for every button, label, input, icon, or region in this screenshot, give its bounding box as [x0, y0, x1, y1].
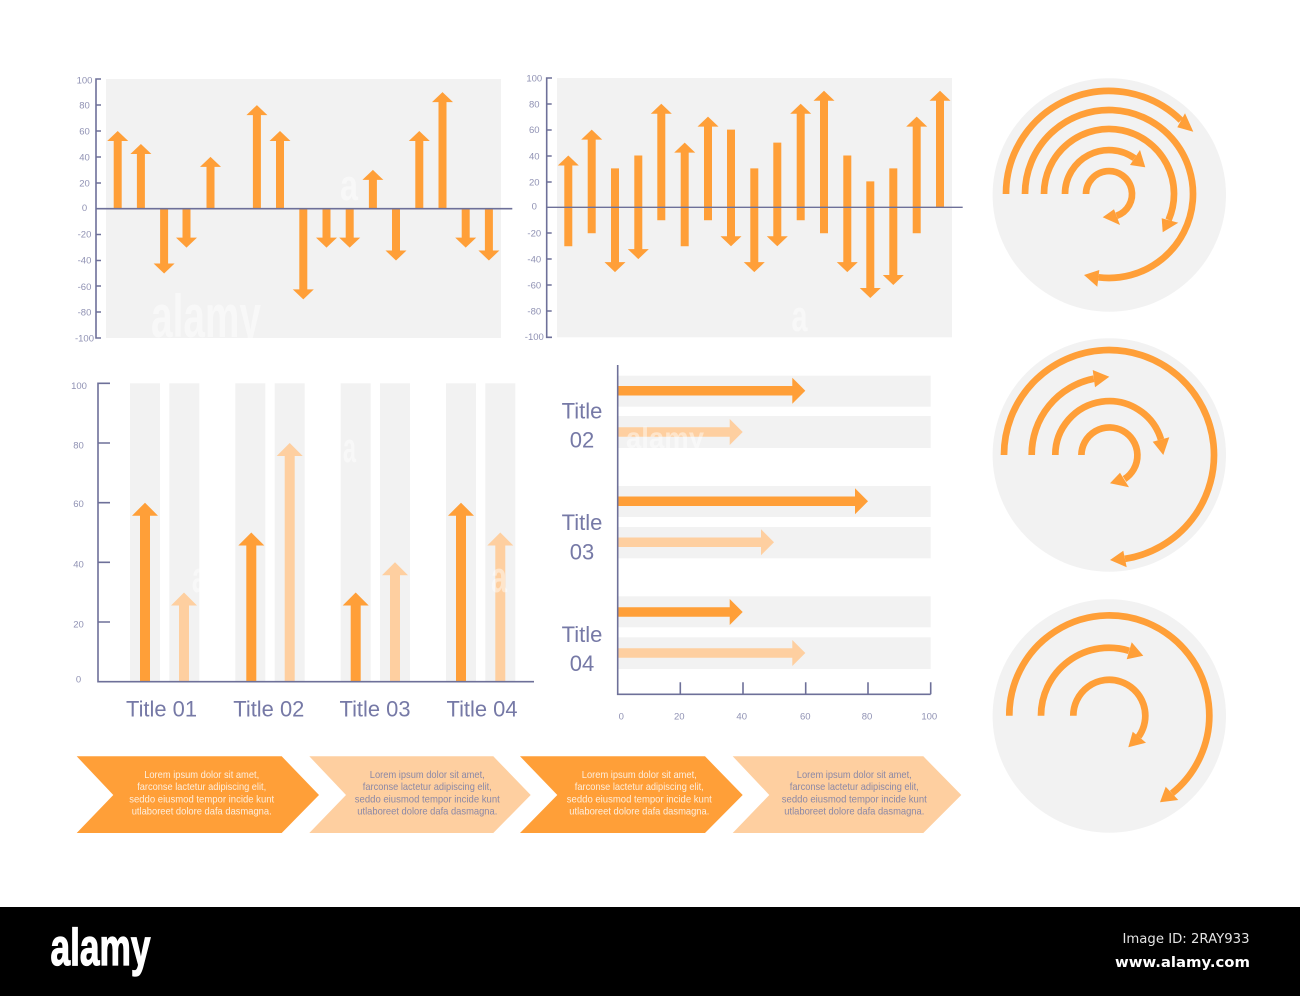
- y axis labels: 80: [73, 440, 84, 451]
- chevron step 4: farconse lactetur adipiscing elit,: [790, 781, 919, 793]
- chevron step 3: seddo eiusmod tempor incide kunt: [567, 793, 712, 805]
- chart: bottom-left grouped vertical arrows: a: [192, 553, 206, 602]
- chevron step 1: [77, 756, 319, 833]
- radial chart: four arcs: [993, 338, 1226, 572]
- category titles: Title 03: [340, 697, 410, 722]
- chevron step 1: Lorem ipsum dolor sit amet,: [144, 769, 259, 781]
- row titles: Title: [562, 398, 602, 423]
- chart: middle horizontal arrows: alamy: [626, 422, 704, 455]
- category titles: Title 04: [446, 697, 518, 722]
- x axis labels: 40: [736, 711, 747, 722]
- category titles: Title 02: [233, 697, 304, 722]
- y axis labels: 40: [79, 153, 90, 164]
- chevron step 4: seddo eiusmod tempor incide kunt: [782, 793, 927, 805]
- chevron step 2: [309, 756, 531, 833]
- chart: bottom-left grouped vertical arrows: a: [491, 553, 507, 602]
- chevron step 1: farconse lactetur adipiscing elit,: [137, 781, 266, 793]
- chart: middle horizontal arrows: [562, 365, 937, 722]
- orange arrows: [107, 92, 499, 299]
- y axis labels: 100: [71, 381, 87, 392]
- y axis labels: -100: [75, 334, 94, 345]
- row titles: [562, 398, 602, 676]
- chevron step 3: Lorem ipsum dolor sit amet,: [582, 769, 697, 781]
- row titles: Title: [562, 510, 602, 535]
- y axis labels: -80: [527, 306, 541, 317]
- chevron step 3: utlaboreet dolore dafa dasmagna.: [569, 806, 709, 818]
- y axis labels: -20: [527, 229, 541, 240]
- x axis labels: 20: [674, 711, 685, 722]
- chart: bottom-left grouped vertical arrows: a: [343, 424, 356, 471]
- y axis with ticks: [96, 79, 101, 338]
- chevron step 3: [520, 756, 743, 833]
- row titles: 02: [570, 428, 594, 453]
- radial chart: three arcs: [993, 599, 1226, 833]
- x axis labels: 80: [862, 711, 872, 722]
- orange arrows: [132, 503, 474, 682]
- chevron step 2: utlaboreet dolore dafa dasmagna.: [357, 806, 497, 818]
- footer logo: alamy: [50, 919, 151, 977]
- row titles: Title: [562, 622, 602, 647]
- y axis labels: 80: [529, 99, 540, 110]
- zero line: [547, 206, 963, 208]
- x axis labels: 60: [800, 711, 811, 722]
- y axis labels: [75, 75, 94, 345]
- arcs: [1004, 350, 1214, 559]
- y axis labels: -40: [527, 254, 541, 265]
- chevron step 2: Lorem ipsum dolor sit amet,: [370, 769, 485, 781]
- category titles: Title 01: [126, 697, 197, 722]
- zero line: [96, 208, 512, 210]
- chart: top-left vertical arrow chart: a: [340, 161, 358, 210]
- y axis labels: 60: [73, 499, 84, 510]
- y axis labels: [71, 381, 87, 686]
- y axis labels: 40: [73, 560, 84, 571]
- arrowheads: [1127, 642, 1178, 802]
- circle background: [993, 338, 1226, 572]
- orange arrows: [558, 91, 950, 298]
- light orange arrows: [171, 443, 513, 682]
- y axis labels: -60: [527, 281, 541, 292]
- arrowheads: [1093, 370, 1169, 567]
- chevron step 1: utlaboreet dolore dafa dasmagna.: [132, 806, 272, 818]
- y axis with ticks: [547, 78, 552, 337]
- arcs: [1006, 91, 1193, 278]
- chevron step 2: seddo eiusmod tempor incide kunt: [355, 793, 500, 805]
- circle background: [993, 599, 1226, 833]
- axes: [98, 383, 534, 682]
- y axis labels: 0: [76, 675, 81, 686]
- y axis labels: 0: [82, 203, 87, 214]
- y axis labels: 20: [529, 177, 540, 188]
- orange arrows: [618, 378, 868, 625]
- chart: top-left vertical arrow chart: [75, 75, 512, 350]
- chevron step 4: Lorem ipsum dolor sit amet,: [797, 769, 912, 781]
- axes: [618, 365, 931, 694]
- radial chart: five arcs: [993, 78, 1226, 312]
- image id: Image ID: 2RAY933: [1122, 932, 1250, 947]
- row titles: 04: [570, 651, 594, 676]
- x axis labels: 0: [619, 711, 624, 722]
- background columns: [130, 383, 515, 682]
- chart panel background: [106, 79, 501, 338]
- y axis labels: 40: [529, 151, 540, 162]
- chevron step 4: [733, 756, 961, 833]
- chart: top-left vertical arrow chart: alamy: [151, 283, 261, 350]
- chevron step 4: utlaboreet dolore dafa dasmagna.: [784, 806, 924, 818]
- arcs: [1009, 615, 1209, 793]
- y axis labels: 60: [529, 125, 540, 136]
- y axis labels: -60: [78, 282, 91, 293]
- y axis labels: [525, 73, 544, 343]
- chevron step 2: farconse lactetur adipiscing elit,: [363, 781, 492, 793]
- y axis labels: -80: [78, 308, 91, 319]
- chevron step 1: seddo eiusmod tempor incide kunt: [129, 793, 274, 805]
- circle background: [993, 78, 1226, 312]
- y axis labels: -40: [78, 256, 91, 267]
- chart panel background: [557, 78, 952, 337]
- y axis labels: 20: [73, 620, 84, 631]
- category titles: [126, 697, 518, 722]
- footer bar: [0, 907, 1300, 996]
- arrowheads: [1084, 113, 1193, 287]
- y axis labels: -100: [525, 332, 544, 343]
- background rows: [618, 376, 931, 669]
- x axis labels: [619, 711, 937, 722]
- light orange arrows: [618, 419, 805, 666]
- y axis labels: 80: [79, 101, 90, 112]
- chart: top-middle vertical arrow chart: a: [792, 292, 808, 341]
- y axis labels: 100: [526, 73, 542, 84]
- y axis labels: -20: [78, 230, 91, 241]
- y axis labels: 0: [532, 201, 537, 212]
- x axis labels: 100: [921, 711, 937, 722]
- y axis labels: 60: [79, 127, 90, 138]
- row titles: 03: [570, 539, 594, 564]
- y axis labels: 20: [79, 179, 90, 190]
- chart: bottom-left grouped vertical arrows: [71, 381, 534, 722]
- chart: top-middle vertical arrow chart: [525, 73, 963, 343]
- chevron step 3: farconse lactetur adipiscing elit,: [575, 781, 704, 793]
- website: www.alamy.com: [1115, 955, 1250, 971]
- y axis labels: 100: [77, 75, 92, 86]
